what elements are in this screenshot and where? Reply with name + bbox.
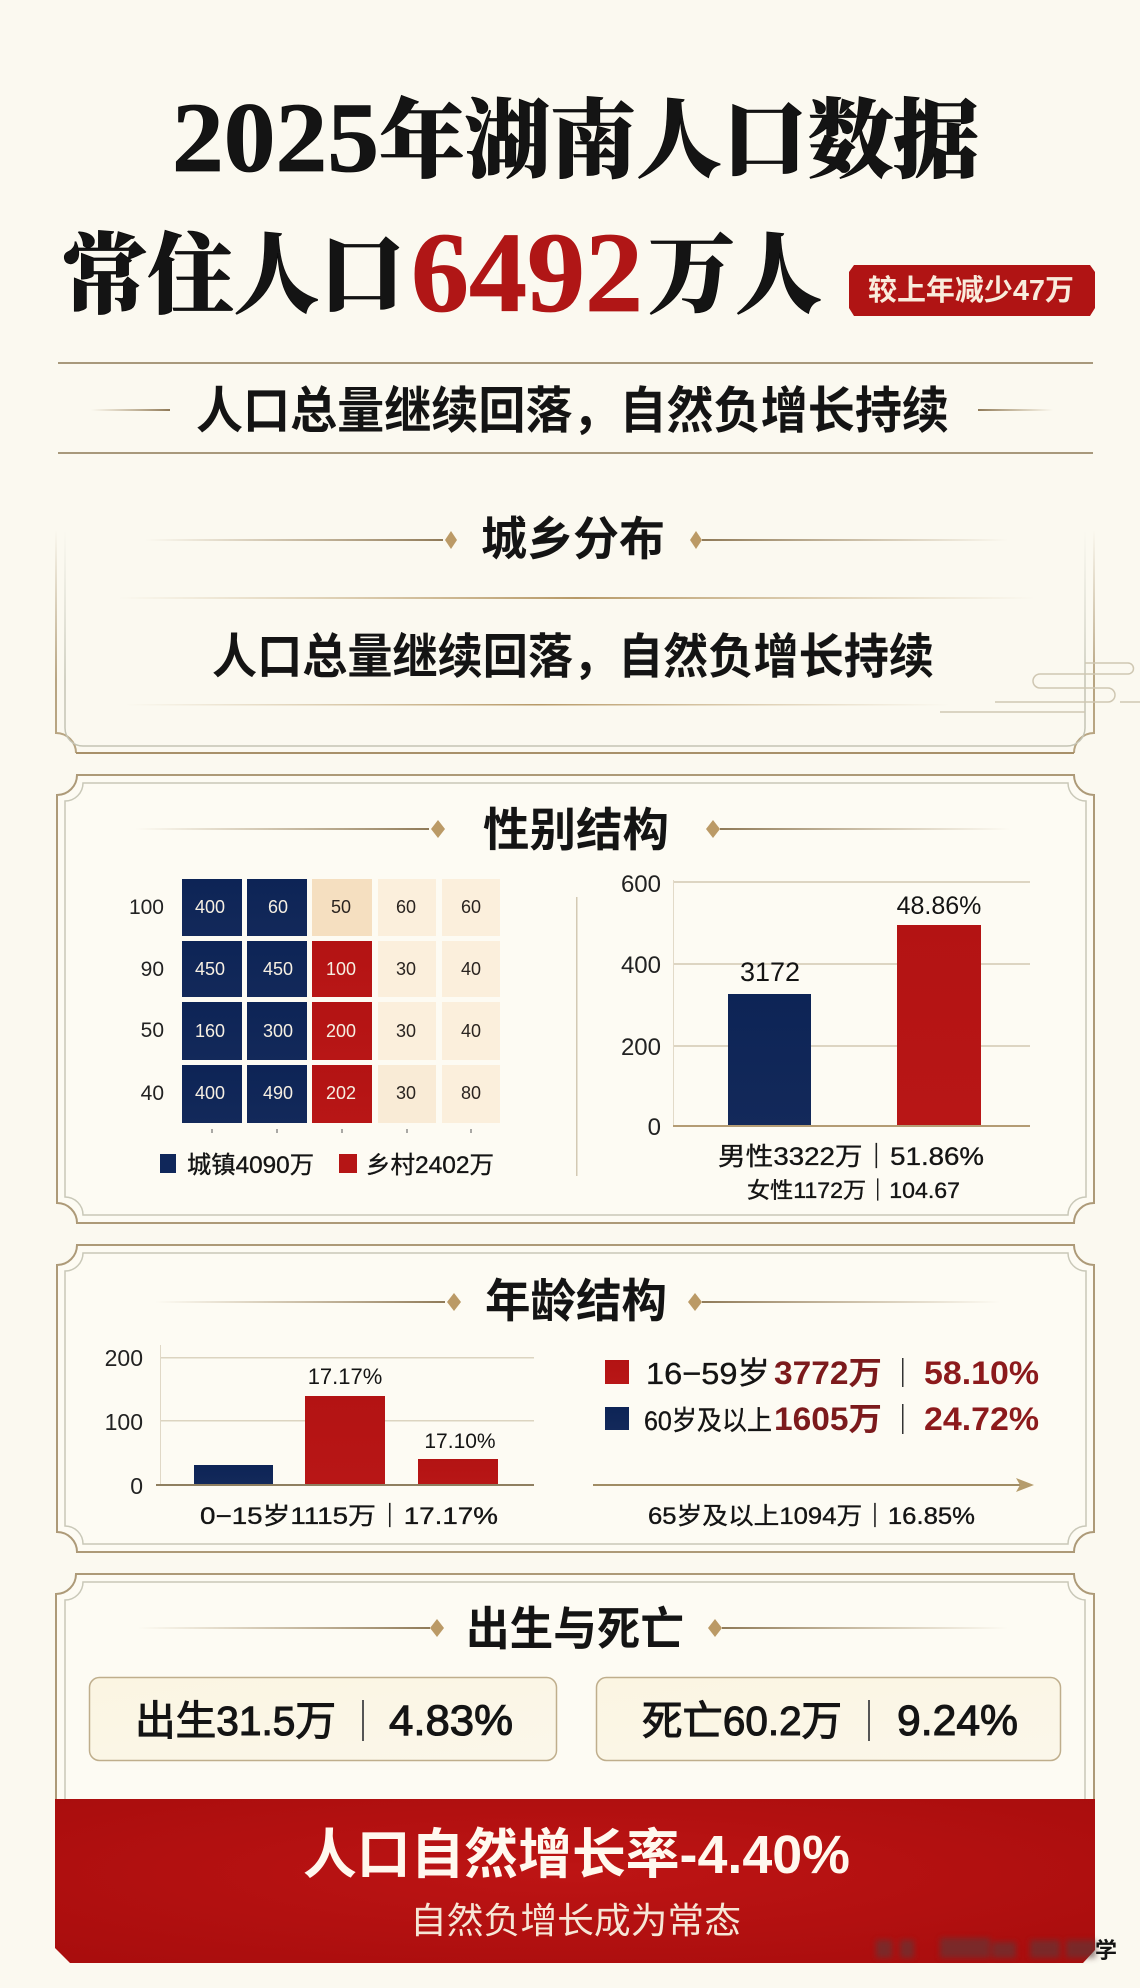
stat card: births: 出生31.5万	[135, 1698, 336, 1744]
heading: 性别结构	[135, 804, 1010, 856]
y-axis labels	[129, 896, 164, 1105]
cell values: 202	[326, 1083, 356, 1103]
banner subtext: 自然负增长成为常态	[410, 1900, 741, 1941]
watermark	[876, 1938, 1117, 1963]
watermark: 学	[1095, 1938, 1117, 1963]
cell values: 100	[326, 959, 356, 979]
cell values: 300	[263, 1021, 293, 1041]
subtitle band: 人口总量继续回落，自然负增长持续	[196, 383, 949, 439]
text: summary sentence: 人口总量继续回落，自然负增长持续	[212, 631, 934, 684]
heading: 城乡分布: 城乡分布	[481, 513, 665, 565]
bar chart: gender	[621, 871, 1030, 1203]
y-axis labels: 100	[129, 896, 164, 919]
badge: change from last year	[849, 265, 1095, 316]
cell values: 490	[263, 1083, 293, 1103]
cell values: 40	[461, 959, 481, 979]
panel: births and deaths	[55, 1574, 1117, 1963]
red banner: natural growth rate	[55, 1799, 1095, 1963]
y-axis labels: 600	[621, 871, 661, 898]
y-axis labels: 90	[141, 958, 164, 981]
stat card: births: 4.83%	[389, 1697, 513, 1745]
y-axis labels: 200	[621, 1034, 661, 1061]
cell values: 200	[326, 1021, 356, 1041]
cell values: 160	[195, 1021, 225, 1041]
headline: 常住人口6492万人: 万人	[648, 229, 822, 326]
legend row: 16-59: 16−59岁	[646, 1356, 770, 1391]
heading: 性别结构: 性别结构	[483, 804, 669, 856]
caption: female: 女性1172万｜104.67	[747, 1178, 960, 1203]
heading: 年龄结构: 年龄结构	[485, 1275, 667, 1327]
title: 2025年湖南人口数据	[172, 82, 979, 193]
bar label: 17.10%	[424, 1430, 496, 1453]
heading: 出生与死亡	[138, 1603, 1008, 1655]
bar chart: age	[105, 1345, 534, 1530]
legend row: 16-59	[605, 1355, 1039, 1391]
panel: age structure	[57, 1245, 1094, 1552]
cell values: 400	[195, 897, 225, 917]
cell values: 450	[263, 959, 293, 979]
y-axis labels: 400	[621, 952, 661, 979]
bar label: 3172: 3172	[740, 957, 800, 987]
legend: 城镇4090万	[187, 1152, 314, 1179]
caption: 65+: 65岁及以上1094万｜16.85%	[648, 1503, 975, 1530]
y-axis labels: 0	[130, 1473, 143, 1499]
cell values: 30	[396, 959, 416, 979]
headline: 常住人口6492万人: 6492	[411, 209, 643, 336]
y-axis labels	[105, 1345, 143, 1499]
legend row: 16-59: 58.10%	[924, 1355, 1039, 1391]
panel: gender structure	[57, 775, 1094, 1223]
caption: 0-15: 0−15岁1115万｜17.17%	[200, 1503, 498, 1530]
legend: 乡村2402万	[366, 1152, 494, 1179]
legend row: 16-59: 3772万	[774, 1355, 882, 1391]
legend row: 60+	[605, 1401, 1039, 1437]
caption: male: 男性3322万｜51.86%	[718, 1143, 984, 1171]
stat card: deaths: 死亡60.2万	[642, 1698, 842, 1744]
heat grid chart	[129, 879, 500, 1179]
bar: 16-59	[305, 1396, 385, 1484]
stat card: deaths	[596, 1678, 1060, 1760]
cell values: 80	[461, 1083, 481, 1103]
legend row: 60+: 1605万	[774, 1401, 882, 1437]
cell values: 30	[396, 1021, 416, 1041]
bar label: 48.86%: 48.86%	[897, 892, 981, 920]
cell values: 30	[396, 1083, 416, 1103]
grid cells	[182, 879, 500, 1123]
panel: urban-rural distribution	[56, 513, 1140, 753]
cell values: 60	[396, 897, 416, 917]
title: 2025年湖南人口数据: 年湖南人口数据	[379, 93, 979, 189]
bar: male	[728, 994, 811, 1126]
badge: change from last year: 较上年减少47万	[868, 274, 1074, 307]
legend row: 60+: 60岁及以上	[644, 1406, 772, 1436]
legend	[160, 1152, 494, 1179]
title: 2025年湖南人口数据: 2025	[172, 82, 379, 193]
heading: 年龄结构	[155, 1275, 1000, 1327]
y-axis labels: 100	[105, 1409, 143, 1435]
y-axis labels: 200	[105, 1345, 143, 1371]
y-axis labels: 40	[141, 1082, 164, 1105]
banner headline: 人口自然增长率-4.40%	[303, 1825, 850, 1885]
arrow	[593, 1478, 1034, 1492]
cell values: 40	[461, 1021, 481, 1041]
headline: 常住人口6492万人	[62, 209, 822, 336]
stat card: births	[90, 1678, 556, 1760]
heading: 城乡分布	[145, 513, 1008, 565]
cell values: 60	[461, 897, 481, 917]
y-axis labels: 0	[648, 1114, 661, 1141]
stat card: deaths: 9.24%	[897, 1697, 1018, 1745]
frame: open-top panel	[56, 530, 1140, 753]
cell values	[195, 897, 481, 1103]
y-axis labels: 50	[141, 1019, 164, 1042]
bar: 0-15	[194, 1465, 273, 1484]
cell values: 400	[195, 1083, 225, 1103]
legend row: 60+: 24.72%	[924, 1401, 1039, 1437]
bar: 60+	[418, 1459, 498, 1484]
bar: female	[897, 925, 981, 1126]
cell values: 50	[331, 897, 351, 917]
cell values: 60	[268, 897, 288, 917]
y-axis labels	[621, 871, 661, 1141]
headline: 常住人口6492万人: 常住人口	[62, 229, 405, 326]
bar label: 17.17%	[308, 1364, 382, 1389]
cell values: 450	[195, 959, 225, 979]
heading: 出生与死亡: 出生与死亡	[466, 1603, 684, 1655]
